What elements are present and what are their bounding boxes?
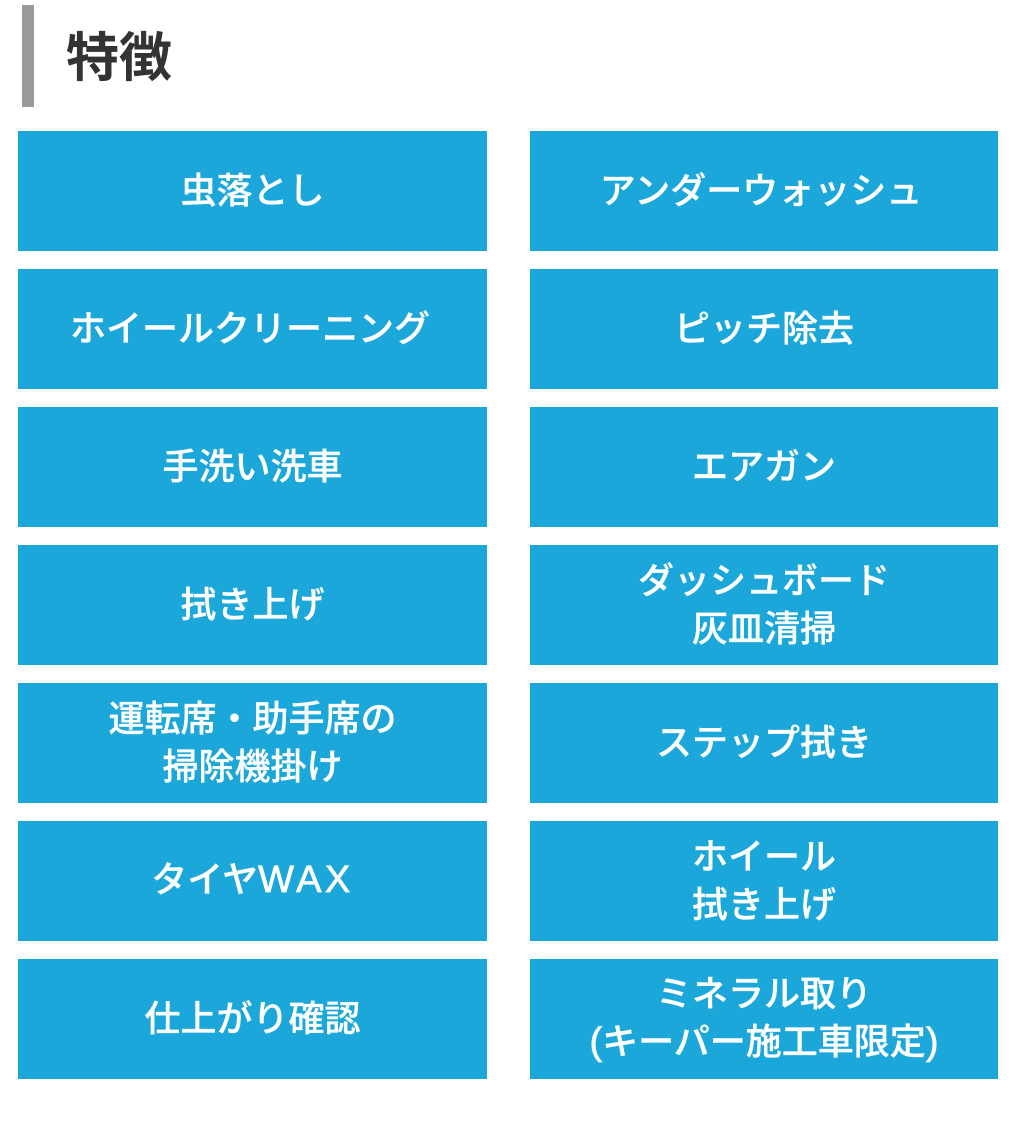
feature: final check: 仕上がり確認 [144,990,360,1042]
feature: dashboard and ashtray: 灰皿清掃 [692,600,836,652]
feature: bug removal: 虫落とし [180,162,324,214]
feature: pitch removal [530,269,998,389]
feature: mineral removal [530,959,998,1079]
feature: seat vacuuming: 掃除機掛け [162,738,342,790]
feature: wheel cleaning [18,269,487,389]
feature: step wipe: ステップ拭き [656,714,872,766]
feature: wipe down: 拭き上げ [180,576,324,628]
feature: dashboard and ashtray: ダッシュボード [638,552,890,604]
feature: air gun: エアガン [692,438,836,490]
feature: tire wax [18,821,487,941]
feature: mineral removal: ミネラル取り [656,964,872,1016]
feature: mineral removal: (キーパー施工車限定) [590,1012,938,1064]
feature: wipe down [18,545,487,665]
feature: underwash: アンダーウォッシュ [600,162,922,214]
feature: hand wash [18,407,487,527]
title: 特徴 [66,29,172,88]
feature: wheel wipe: ホイール [692,828,836,880]
feature: air gun [530,407,998,527]
feature: wheel wipe [530,821,998,941]
feature: seat vacuuming [18,683,487,803]
feature: hand wash: 手洗い洗車 [162,438,342,490]
feature: tire wax: タイヤWAX [151,850,354,902]
feature: final check [18,959,487,1079]
feature: underwash [530,131,998,251]
feature: bug removal [18,131,487,251]
feature: wheel cleaning: ホイールクリーニング [70,300,430,352]
feature: seat vacuuming: 運転席・助手席の [108,690,396,742]
feature: dashboard and ashtray [530,545,998,665]
heading accent bar [22,5,34,107]
feature: step wipe [530,683,998,803]
feature: wheel wipe: 拭き上げ [692,876,836,928]
feature: pitch removal: ピッチ除去 [674,300,854,352]
